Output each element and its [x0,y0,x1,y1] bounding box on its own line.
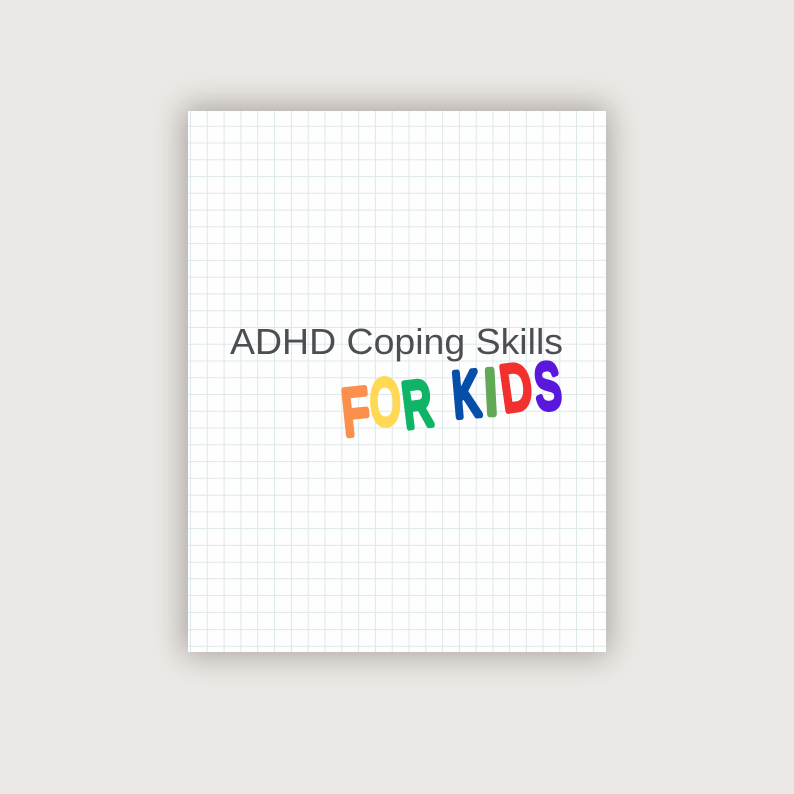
title: ADHD Coping Skills: ADHD Coping Skills [230,321,563,362]
graph paper grid [188,111,606,652]
subtitle: FOR KIDS: I [482,357,500,429]
subtitle: FOR KIDS: K [450,359,483,431]
subtitle: FOR KIDS: S [531,350,564,424]
subtitle: FOR KIDS: F [338,374,373,449]
panel: notebook page with grid [188,111,606,652]
subtitle: FOR KIDS: O [369,367,401,439]
subtitle: FOR KIDS: R [399,369,436,442]
subtitle: FOR KIDS [338,350,564,449]
subtitle: FOR KIDS: D [496,351,536,425]
